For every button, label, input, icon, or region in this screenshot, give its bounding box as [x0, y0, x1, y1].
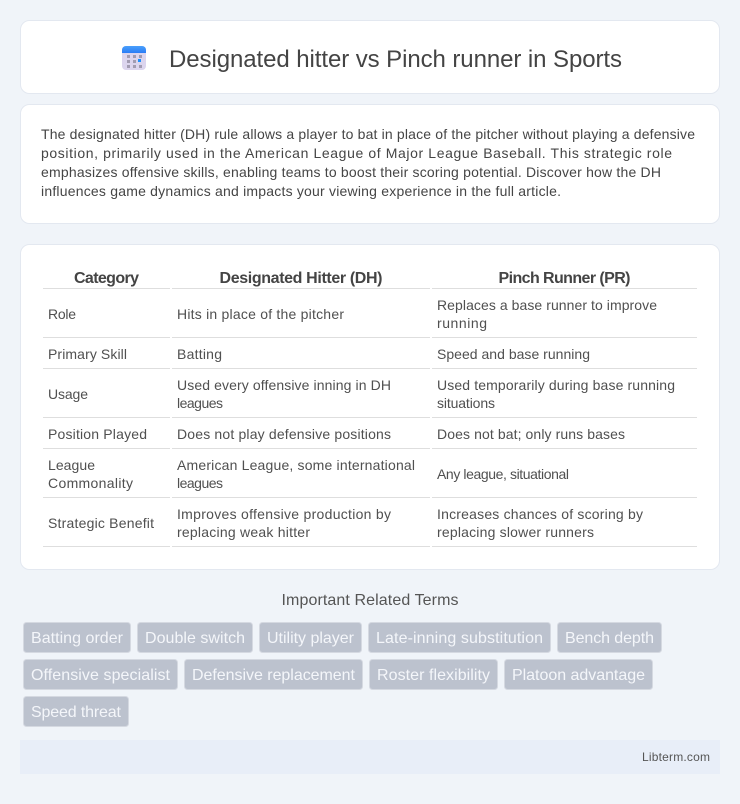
- row: role: Replaces a base runner to improve: [437, 297, 657, 313]
- tag: defensive replacement: Defensive replacement: [192, 667, 356, 684]
- row: primary skill: [48, 346, 590, 362]
- header card: [20, 20, 720, 94]
- tag: speed threat: Speed threat: [31, 704, 122, 721]
- row: role: [48, 297, 657, 331]
- title: Designated hitter vs Pinch runner in Sports: [169, 46, 622, 73]
- row: strategic benefit: [48, 506, 643, 540]
- table header: Designated Hitter (DH): [220, 270, 382, 287]
- row: strategic benefit: replacing weak hitter: [177, 524, 310, 540]
- tag: defensive replacement: [184, 660, 362, 690]
- intro text: position, primarily used in the American League of Major League Baseball. This strategic role: [41, 145, 672, 161]
- row: league commonality: American League, some international: [177, 457, 415, 473]
- intro paragraph card: [20, 104, 720, 224]
- tag: late-inning substitution: Late-inning substitution: [376, 630, 543, 647]
- table header: [74, 270, 630, 287]
- row: usage: Used temporarily during base running: [437, 377, 675, 393]
- tag: platoon advantage: Platoon advantage: [512, 667, 645, 684]
- row: usage: [48, 377, 675, 411]
- table header: Pinch Runner (PR): [498, 270, 630, 287]
- row: strategic benefit: Strategic Benefit: [48, 515, 154, 531]
- row: position played: Does not bat; only runs bases: [437, 426, 625, 442]
- row: strategic benefit: replacing slower runners: [437, 524, 594, 540]
- related terms heading: Important Related Terms: [282, 592, 458, 609]
- tag: batting order: Batting order: [31, 630, 124, 647]
- tag: utility player: Utility player: [267, 630, 355, 647]
- tag: double switch: [138, 622, 252, 652]
- row: role: running: [437, 315, 487, 331]
- row: league commonality: Any league, situational: [437, 466, 569, 482]
- tag: utility player: [260, 622, 362, 652]
- tag: speed threat: [24, 696, 128, 726]
- intro text: influences game dynamics and impacts your viewing experience in the full article.: [41, 183, 561, 199]
- tag: late-inning substitution: [368, 622, 550, 652]
- intro text: The designated hitter (DH) rule allows a player to bat in place of the pitcher without playing a defensive: [41, 126, 695, 142]
- row: primary skill: Primary Skill: [48, 346, 127, 362]
- row: primary skill: Speed and base running: [437, 346, 590, 362]
- intro text: [41, 126, 695, 199]
- row: league commonality: League: [48, 457, 95, 473]
- row: usage: situations: [437, 395, 495, 411]
- row: position played: Does not play defensive positions: [177, 426, 391, 442]
- tag: roster flexibility: [370, 660, 498, 690]
- related terms tags: [24, 622, 662, 726]
- table header: Category: [74, 270, 139, 287]
- row: position played: [48, 426, 625, 442]
- row: strategic benefit: Increases chances of scoring by: [437, 506, 643, 522]
- row: league commonality: Commonality: [48, 475, 133, 491]
- row: usage: leagues: [177, 395, 223, 411]
- row: position played: Position Played: [48, 426, 147, 442]
- tag: bench depth: [558, 622, 662, 652]
- tag: bench depth: Bench depth: [565, 630, 654, 647]
- footer credit: Libterm.com: [642, 750, 710, 764]
- tag: roster flexibility: Roster flexibility: [377, 667, 490, 684]
- footer bar: [20, 740, 720, 774]
- tag: offensive specialist: Offensive specialist: [31, 667, 171, 684]
- icon: calendar: [122, 46, 146, 70]
- row: primary skill: Batting: [177, 346, 222, 362]
- comparison table card: [20, 244, 720, 570]
- row: strategic benefit: Improves offensive production by: [177, 506, 391, 522]
- row: league commonality: leagues: [177, 475, 223, 491]
- row: league commonality: [48, 457, 569, 491]
- tag: platoon advantage: [504, 660, 652, 690]
- row: role: Role: [48, 306, 76, 322]
- tag: offensive specialist: [24, 660, 178, 690]
- row: usage: Used every offensive inning in DH: [177, 377, 391, 393]
- row: role: Hits in place of the pitcher: [177, 306, 344, 322]
- tag: batting order: [24, 622, 130, 652]
- table grid lines: [43, 288, 697, 546]
- tag: double switch: Double switch: [145, 630, 245, 647]
- row: usage: Usage: [48, 386, 88, 402]
- intro text: emphasizes offensive skills, enabling teams to boost their scoring potential. Discover how the DH: [41, 164, 661, 180]
